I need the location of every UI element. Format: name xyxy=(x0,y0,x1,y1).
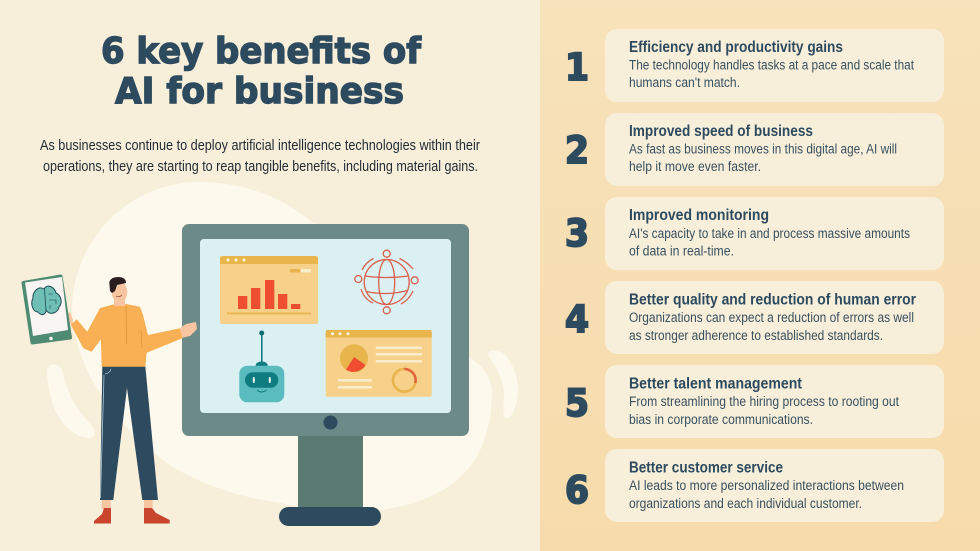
card 6: organizations and each individual customer. xyxy=(629,496,862,511)
icon: robot xyxy=(239,330,284,402)
card 1 xyxy=(605,29,944,102)
card 2 xyxy=(605,113,944,186)
person legs xyxy=(100,366,158,509)
benefit 1 xyxy=(565,29,944,102)
number 6: 6 xyxy=(565,468,589,512)
card 6: AI leads to more personalized interactions between xyxy=(629,478,904,493)
card 3 xyxy=(605,197,944,270)
intro text xyxy=(40,137,480,175)
card 2: Improved speed of business xyxy=(629,123,813,140)
background blobs xyxy=(47,182,518,511)
benefit 6 xyxy=(565,449,944,522)
icon: tablet with brain xyxy=(22,274,72,344)
pie chart xyxy=(340,344,368,372)
benefit 2 xyxy=(565,113,944,186)
card 1: The technology handles tasks at a pace and scale that xyxy=(629,58,914,72)
monitor xyxy=(182,224,469,526)
icon: globe xyxy=(355,250,418,314)
card 2: As fast as business moves in this digital age, AI will xyxy=(629,142,897,156)
brain xyxy=(32,286,61,315)
card 5: Better talent management xyxy=(629,376,802,392)
person head xyxy=(109,277,127,306)
card 4 xyxy=(605,281,944,354)
card 2: help it move even faster. xyxy=(629,159,761,174)
number 1: 1 xyxy=(565,45,589,89)
donut chart xyxy=(393,369,416,392)
card 1: humans can't match. xyxy=(629,75,740,90)
benefit 4 xyxy=(565,281,944,354)
benefit 5 xyxy=(565,365,944,438)
person shoes xyxy=(94,508,170,524)
title xyxy=(101,31,421,112)
left background panel xyxy=(0,0,540,551)
benefit 3 xyxy=(565,197,944,270)
monitor screen xyxy=(200,239,451,413)
person holding tablet xyxy=(22,274,197,524)
intro text: As businesses continue to deploy artificial intelligence technologies within their xyxy=(40,137,480,154)
title: 6 key benefits of xyxy=(101,31,421,72)
monitor camera xyxy=(324,416,338,430)
intro text: operations, they are starting to reap tangible benefits, including material gains. xyxy=(43,158,478,175)
card 5: From streamlining the hiring process to rooting out xyxy=(629,394,899,409)
card 3: of data in real-time. xyxy=(629,244,734,258)
number 4: 4 xyxy=(565,297,589,341)
card 4: as stronger adherence to established standards. xyxy=(629,328,883,343)
monitor frame xyxy=(182,224,469,436)
right background panel xyxy=(540,0,980,551)
dashboard window xyxy=(326,330,432,397)
card 1: Efficiency and productivity gains xyxy=(629,39,843,56)
monitor base xyxy=(279,507,381,526)
card 4: Organizations can expect a reduction of errors as well xyxy=(629,310,914,325)
card 5 xyxy=(605,365,944,438)
card 3: AI's capacity to take in and process massive amounts xyxy=(629,226,910,241)
number 3: 3 xyxy=(565,211,589,255)
person shirt xyxy=(67,304,197,367)
card 3: Improved monitoring xyxy=(629,207,769,224)
title: AI for business xyxy=(115,71,404,112)
bar chart window xyxy=(220,256,318,324)
number 5: 5 xyxy=(565,381,589,425)
card 5: bias in corporate communications. xyxy=(629,412,813,427)
card 6 xyxy=(605,449,944,522)
card 4: Better quality and reduction of human error xyxy=(629,292,916,308)
monitor stand xyxy=(298,436,363,508)
card 6: Better customer service xyxy=(629,460,783,476)
number 2: 2 xyxy=(565,128,589,172)
